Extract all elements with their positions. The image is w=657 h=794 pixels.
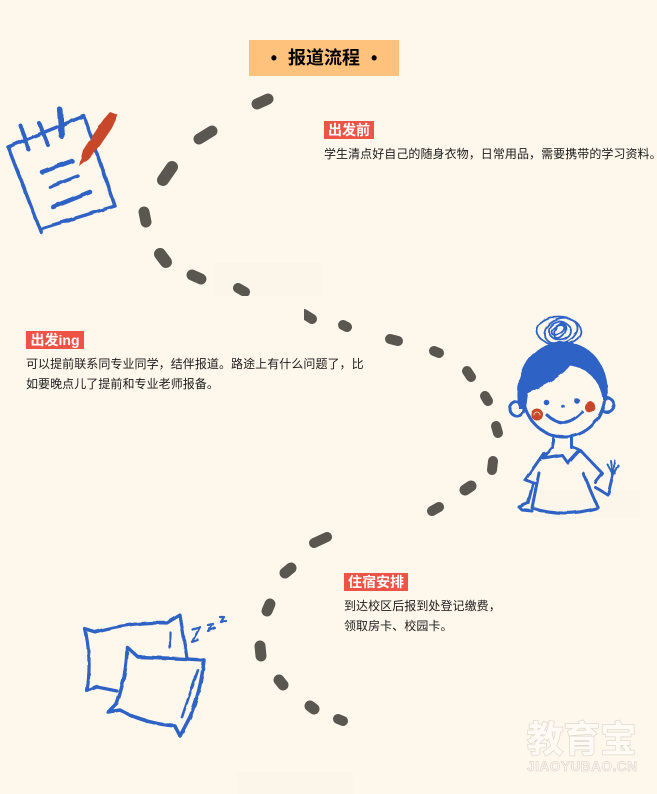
right arm and hand	[595, 474, 613, 495]
eyes and nose	[544, 398, 580, 408]
title	[249, 40, 399, 76]
text block: on the way	[26, 331, 364, 391]
body: accommodation: 到达校区后报到处登记缴费，	[344, 599, 501, 613]
tag: on the way: 出发ing	[30, 332, 80, 348]
tag: before departure: 出发前	[328, 122, 370, 138]
logo watermark: JIAOYUBAO.CN	[527, 759, 637, 774]
faint watermark patches	[213, 263, 640, 794]
front pillow	[108, 647, 204, 736]
cheeks	[531, 402, 596, 420]
icon: pillows and zzz	[85, 615, 226, 736]
face	[523, 351, 605, 437]
body: on the way	[26, 357, 364, 391]
body: accommodation: 领取房卡、校园卡。	[344, 619, 453, 633]
icon: girl waving	[510, 314, 619, 513]
left arm	[519, 484, 533, 511]
tag: accommodation: 住宿安排	[348, 574, 404, 590]
mouth	[547, 412, 582, 422]
body: on the way: 如要晚点儿了提前和专业老师报备。	[26, 377, 219, 391]
title: • 报道流程 •	[271, 48, 377, 68]
dashed journey path	[144, 99, 498, 721]
text block: before departure	[324, 121, 657, 161]
hair	[518, 342, 607, 408]
hair bun	[537, 314, 581, 348]
logo watermark: 教育宝	[527, 719, 636, 760]
zzz	[170, 617, 226, 648]
ears	[510, 402, 524, 416]
neck and collar	[553, 438, 572, 448]
back pillow	[85, 615, 187, 691]
shirt	[525, 450, 602, 483]
text block: accommodation	[344, 573, 501, 633]
body: accommodation	[344, 599, 501, 633]
icon: notepad and pen	[8, 110, 118, 232]
body: on the way: 可以提前联系同专业同学，结伴报道。路途上有什么问题了，比	[26, 357, 364, 371]
body: before departure: 学生清点好自己的随身衣物，日常用品，需要携带的学习资料。	[324, 147, 657, 161]
